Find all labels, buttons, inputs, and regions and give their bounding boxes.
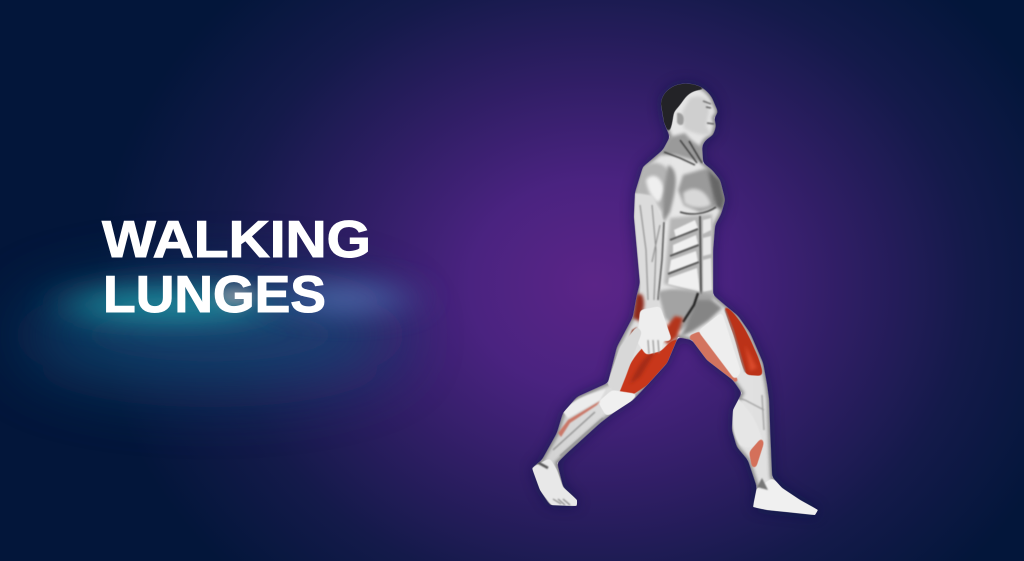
head hair bbox=[661, 84, 703, 131]
glow behind title bbox=[20, 285, 407, 385]
red: rear leg quadriceps bbox=[620, 339, 677, 394]
rear foot bbox=[531, 458, 578, 507]
arm bbox=[634, 193, 665, 318]
pelvis and shorts area bbox=[658, 289, 713, 331]
red: front calf tibialis bbox=[749, 437, 764, 468]
deltoid bbox=[636, 163, 670, 212]
ear bbox=[677, 113, 684, 125]
front foot bbox=[752, 478, 819, 516]
red: rear leg gluteus edge bbox=[633, 294, 644, 322]
neck and trapezius shading bbox=[660, 133, 703, 163]
white thigh band on front leg bbox=[699, 314, 740, 378]
rear thigh white band bbox=[608, 328, 642, 392]
red: front leg hamstring bbox=[688, 331, 740, 382]
abdominals bbox=[664, 214, 714, 300]
rear lower leg details bbox=[563, 389, 606, 418]
red: front leg quadriceps bbox=[723, 305, 763, 376]
face shading bbox=[682, 97, 711, 135]
body silhouette bbox=[532, 84, 818, 515]
pectoral bbox=[678, 168, 718, 212]
title: LUNGES bbox=[103, 266, 326, 324]
muscular figure bbox=[531, 82, 819, 516]
hand bbox=[637, 306, 672, 355]
front knee and calf bbox=[732, 398, 742, 446]
title: WALKING bbox=[102, 211, 371, 269]
figure shadow bbox=[532, 84, 818, 515]
title bbox=[102, 211, 371, 324]
eye and brow bbox=[703, 101, 714, 124]
inner edge shading bbox=[532, 84, 818, 515]
rear knee bbox=[599, 390, 636, 416]
